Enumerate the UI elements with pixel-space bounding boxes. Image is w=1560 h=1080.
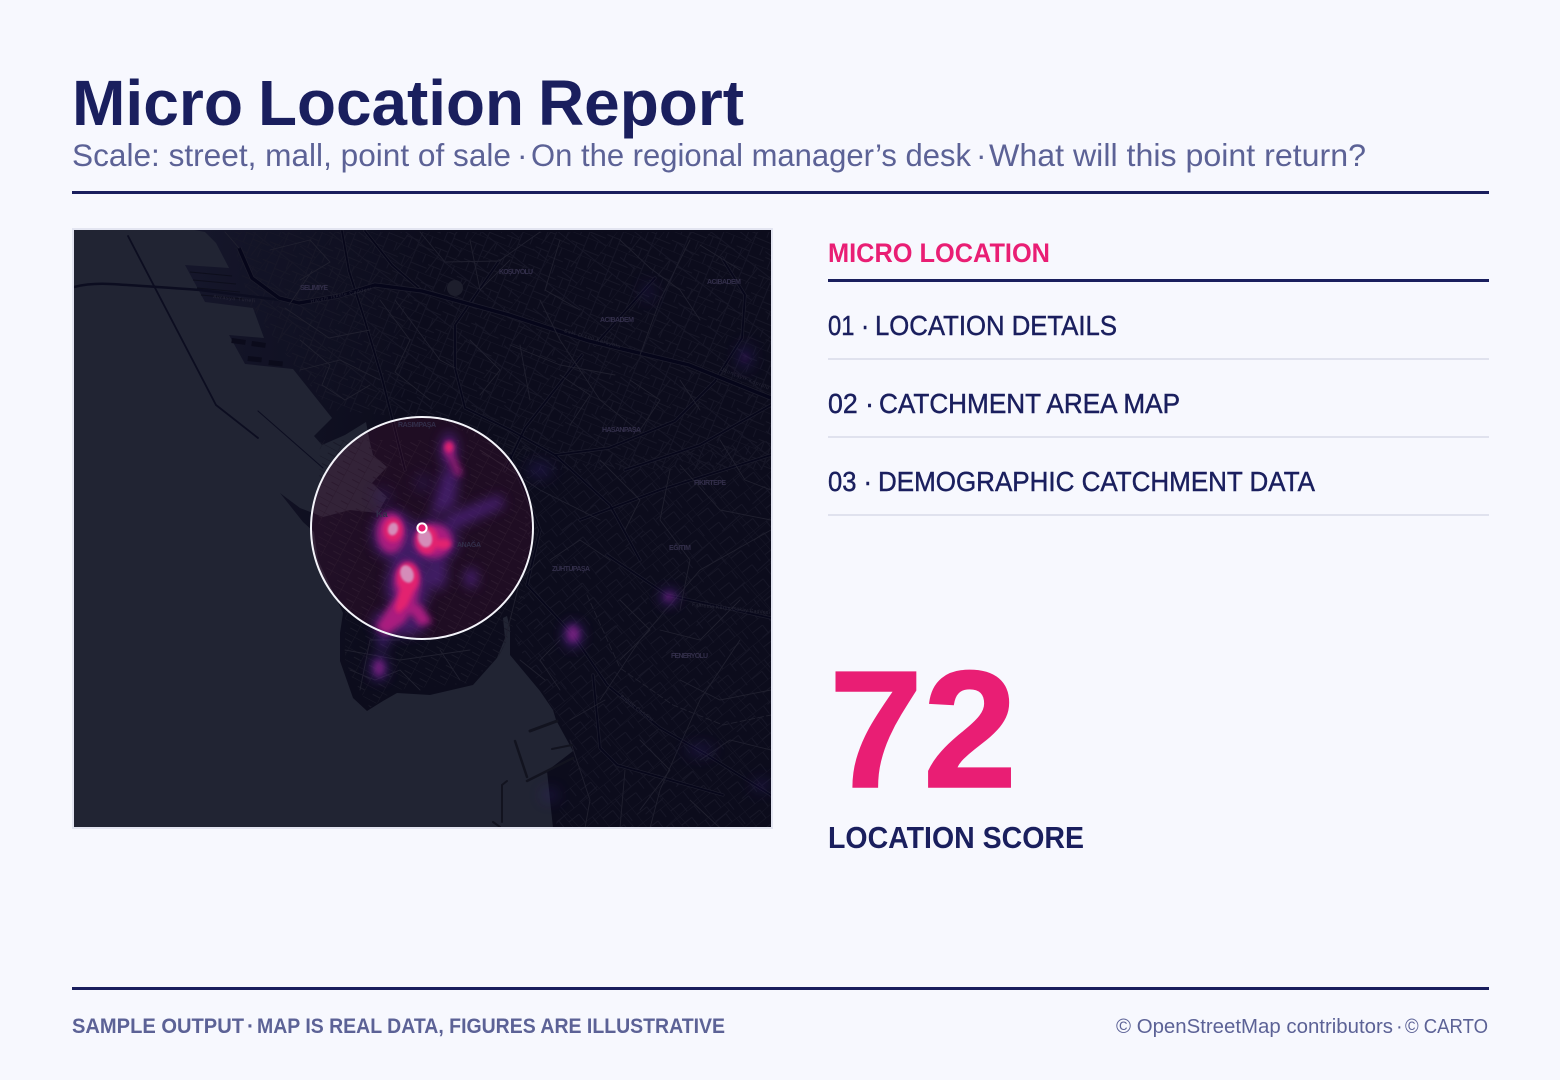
neighbourhood labels: EĞITIM — [669, 543, 691, 552]
title: Micro — [72, 67, 243, 139]
panel: location score — [828, 637, 1084, 855]
list item 03 — [828, 466, 1489, 516]
score value: 72 — [829, 637, 1017, 823]
land mass — [185, 226, 775, 828]
heat layer: magenta — [376, 441, 463, 635]
list item 02 — [828, 388, 1489, 438]
neighbourhood labels: Fahrettin Kerim Gökay Caddesi — [692, 602, 770, 616]
footer note: · — [247, 1015, 254, 1038]
list item 03: DEMOGRAPHIC CATCHMENT DATA — [878, 466, 1315, 497]
neighbourhood labels: HASANPAŞA — [602, 427, 641, 434]
neighbourhood labels: Eski D.100 Karayolu — [563, 328, 621, 350]
list item 01 — [828, 310, 1489, 360]
attribution: · — [1396, 1016, 1403, 1038]
map base — [74, 226, 775, 828]
pier detail — [231, 338, 283, 366]
footer note: SAMPLE OUTPUT — [72, 1015, 244, 1038]
neighbourhood labels: ZÜHTÜPAŞA — [552, 564, 590, 573]
neighbourhood labels: ACIBADEM — [707, 279, 741, 286]
neighbourhood labels: FENERYOLU — [671, 653, 708, 660]
neighbourhood labels: FIKIRTEPE — [694, 480, 726, 487]
section rule — [828, 279, 1489, 282]
major roads — [342, 231, 771, 795]
location marker — [417, 523, 427, 533]
list item 03: 03 · — [828, 466, 872, 497]
attribution: © OpenStreetMap contributors — [1116, 1016, 1393, 1038]
heat layer: pale core — [386, 521, 434, 585]
heatmap — [370, 282, 772, 801]
catchment ring — [311, 417, 533, 639]
map border — [73, 229, 772, 828]
score label: LOCATION SCORE — [828, 820, 1084, 855]
highway — [239, 248, 771, 398]
catchment tint — [311, 417, 533, 639]
neighbourhood labels: Harem Iskele Caddesi — [310, 286, 372, 305]
minor roads — [225, 232, 771, 828]
heat layer: faint spots — [375, 282, 772, 801]
local labels: RASIMPAŞA — [398, 422, 436, 429]
harbour piers — [493, 721, 573, 827]
panel: micro location list — [828, 238, 1489, 516]
neighbourhood labels — [213, 269, 770, 723]
list item 02: CATCHMENT AREA MAP — [879, 388, 1180, 419]
subtitle: · — [517, 137, 528, 173]
neighbourhood labels: Avrasya Tüneli — [213, 294, 255, 304]
section heading: MICRO LOCATION — [828, 238, 1050, 268]
list item 01: 01 · — [828, 310, 869, 341]
title — [72, 67, 744, 139]
tunnel and breakwaters — [74, 236, 323, 468]
title: Report — [538, 67, 744, 139]
subtitle — [72, 137, 1366, 173]
header rule — [72, 191, 1489, 194]
neighbourhood labels: KOŞUYOLU — [499, 269, 533, 276]
list item 01: LOCATION DETAILS — [875, 310, 1117, 341]
subtitle: Scale: street, mall, point of sale — [72, 137, 511, 173]
neighbourhood labels: Uzunçayır Köprülü — [719, 366, 770, 391]
heat layer: hot pink — [384, 442, 453, 614]
attribution: © CARTO — [1405, 1016, 1488, 1038]
footer note — [72, 1015, 725, 1038]
major roads casing — [342, 231, 771, 795]
footer note: MAP IS REAL DATA, FIGURES ARE ILLUSTRATIVE — [257, 1015, 725, 1038]
heat layer: outlying magenta — [374, 355, 747, 676]
footer rule — [72, 987, 1489, 990]
street grids — [334, 232, 771, 470]
footer — [72, 987, 1489, 1038]
subtitle: On the regional manager’s desk — [531, 137, 971, 173]
heat layer: purple glow — [370, 432, 678, 681]
panel: catchment map — [72, 226, 775, 829]
highway casing — [239, 248, 771, 398]
title: Location — [258, 67, 524, 139]
local labels: Ka — [376, 509, 388, 519]
map frame — [72, 228, 773, 829]
subtitle: · — [976, 137, 986, 173]
list item 02: 02 · — [828, 388, 874, 419]
local labels: ANAĞA — [457, 540, 481, 549]
neighbourhood labels: Bağdat Caddesi — [619, 694, 654, 723]
water pond — [447, 280, 463, 296]
neighbourhood labels: SELIMIYE — [300, 285, 328, 292]
pier lines — [190, 272, 244, 299]
local labels — [376, 422, 481, 549]
neighbourhood labels: ACIBADEM — [600, 317, 634, 324]
subtitle: What will this point return? — [989, 137, 1366, 173]
